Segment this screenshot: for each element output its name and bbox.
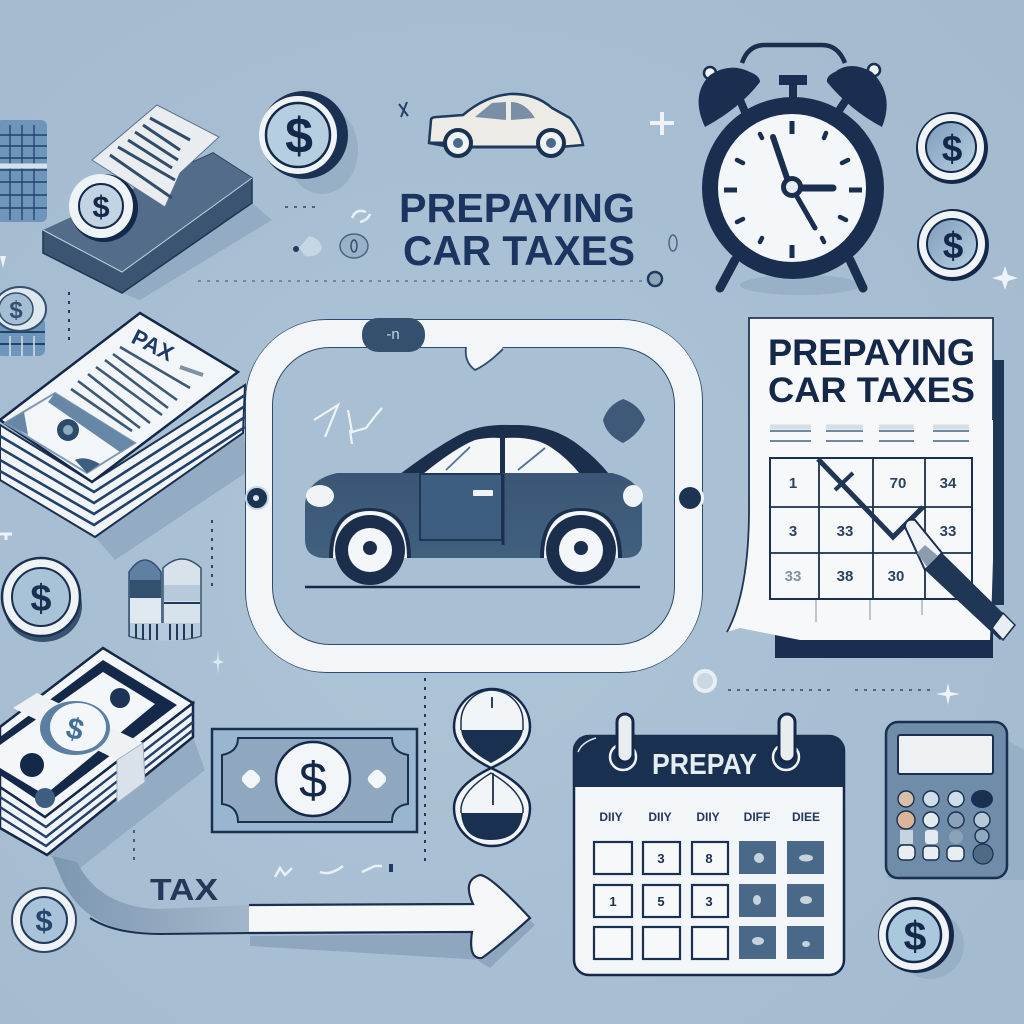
icon: alarm clock bbox=[699, 45, 887, 295]
icon: coins right: $ bbox=[943, 225, 964, 266]
panel: prepaying car taxes calendar document bbox=[727, 318, 1015, 658]
icon: dollar coin top bbox=[259, 91, 358, 194]
icon: coin bottom left: $ bbox=[35, 903, 53, 938]
icon: coin left middle bbox=[2, 558, 82, 642]
icon: main car bbox=[305, 425, 643, 588]
panel: prepay calendar: 8 bbox=[705, 851, 713, 866]
icon: coin and stack left edge: $ bbox=[9, 297, 23, 324]
calendar grid: 1 bbox=[789, 475, 797, 492]
panel: prepay calendar: 3 bbox=[705, 894, 713, 909]
calendar grid: 33 bbox=[837, 523, 853, 540]
calendar grid: 33 bbox=[785, 568, 801, 585]
weekday labels bbox=[599, 810, 820, 824]
panel: prepay calendar: 3 bbox=[657, 851, 665, 866]
icon: coin bottom right bbox=[878, 897, 964, 979]
icon: banknote bbox=[212, 729, 417, 832]
icon: pen bbox=[905, 520, 1015, 640]
icon: coins right: $ bbox=[942, 128, 963, 169]
dotted connector lines bbox=[69, 207, 930, 862]
panel heading: PREPAYING bbox=[768, 332, 975, 373]
calendar grid: 34 bbox=[940, 475, 957, 492]
icon: coins right bbox=[916, 112, 989, 281]
weekday labels: DIIY bbox=[599, 810, 623, 824]
icon: speech tail on frame bbox=[466, 346, 503, 370]
title: PREPAYING bbox=[399, 185, 635, 231]
icon: coin bottom right: $ bbox=[904, 913, 927, 959]
icon: small car top bbox=[429, 94, 583, 156]
icon: wallet with paper and coin bbox=[43, 105, 272, 300]
icon: frame node left bbox=[246, 487, 268, 509]
icon: coin stack top left bbox=[0, 120, 47, 222]
calendar grid: 3 bbox=[789, 523, 797, 540]
weekday labels: DIIY bbox=[696, 810, 720, 824]
panel: central rounded frame with car bbox=[245, 318, 704, 673]
icon: dollar coin top: $ bbox=[285, 108, 313, 164]
panel: prepay calendar: 1 bbox=[609, 894, 617, 909]
icon: coin and stack left edge bbox=[0, 287, 46, 356]
icon: calendar rings bbox=[610, 714, 799, 770]
calendar grid bbox=[770, 427, 972, 622]
icon: banknote: $ bbox=[299, 752, 327, 808]
icon: banknote stack: $ bbox=[63, 711, 88, 748]
icon: coin cylinders bbox=[129, 559, 201, 640]
calendar grid: 70 bbox=[890, 475, 906, 492]
icon: frame clasp: -n bbox=[386, 326, 400, 343]
weekday labels: DIFF bbox=[744, 810, 770, 824]
calendar grid: 38 bbox=[837, 568, 853, 585]
arrow: tax arrow bbox=[52, 856, 535, 968]
icon: paper on wallet bbox=[92, 105, 219, 207]
calendar grid: 33 bbox=[940, 523, 956, 540]
title: CAR TAXES bbox=[403, 227, 635, 274]
icon: calculator bbox=[886, 722, 1024, 880]
icon: coin on wallet bbox=[69, 174, 138, 242]
panel: prepay calendar: 5 bbox=[657, 894, 665, 909]
panel heading bbox=[768, 332, 975, 410]
weekday labels: DIEE bbox=[792, 810, 820, 824]
panel: prepay calendar bbox=[574, 714, 844, 975]
icon: banknote stack bbox=[0, 648, 205, 868]
icon: coin left middle: $ bbox=[30, 578, 52, 620]
icon: frame clasp bbox=[362, 318, 425, 352]
weekday labels: DIIY bbox=[648, 810, 672, 824]
small decorative glyphs bbox=[0, 102, 1018, 877]
icon: tax paper stack: PAX bbox=[128, 324, 178, 366]
icon: sparkle shards bbox=[314, 405, 382, 444]
title bbox=[399, 185, 635, 274]
icon: dark diamond bbox=[603, 399, 645, 443]
calendar cells bbox=[594, 842, 728, 959]
icon: coin on wallet: $ bbox=[92, 189, 110, 224]
icon: frame node right bbox=[676, 484, 704, 512]
icon: tax paper stack bbox=[0, 313, 250, 560]
panel heading: CAR TAXES bbox=[768, 371, 975, 410]
calendar heading: PREPAY bbox=[652, 749, 757, 781]
icon: hourglass bbox=[454, 689, 530, 846]
calendar grid: 30 bbox=[888, 568, 904, 585]
tax label: TAX bbox=[150, 872, 218, 907]
icon: coin bottom left bbox=[12, 888, 76, 952]
